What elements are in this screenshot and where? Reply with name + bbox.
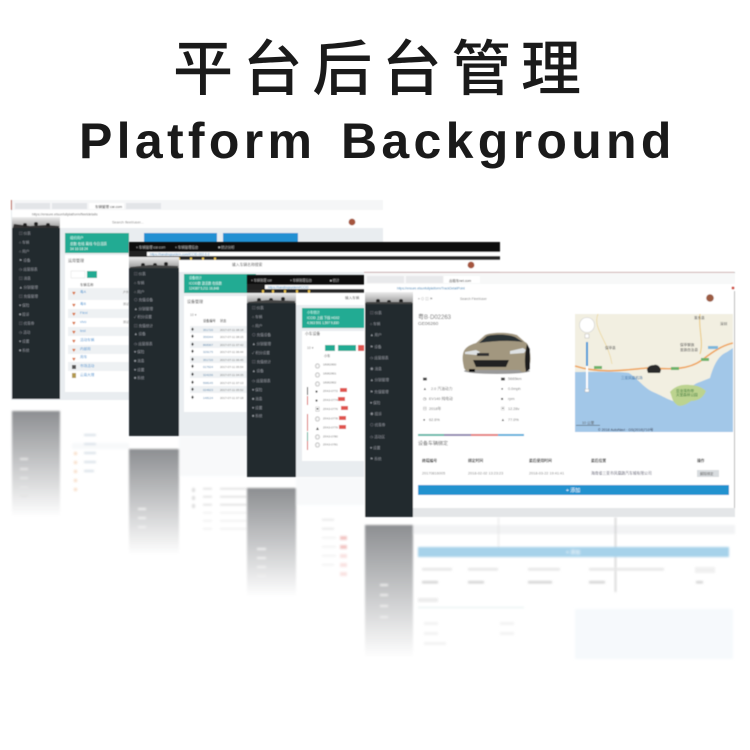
- sidebar: ▤ 消息: [19, 276, 31, 280]
- reflection: window 4: + 添加: [566, 549, 580, 556]
- sidebar: ▤ 充值统计: [134, 323, 153, 328]
- device table: 终端编号: [422, 458, 437, 463]
- stat card: teal: 设备统计: [189, 275, 203, 280]
- sidebar: ⚑ 系统: [370, 456, 382, 461]
- panel: vehicle list: ♥: [72, 291, 76, 297]
- sidebar: ⚑ 充值管理: [370, 389, 389, 394]
- panel: device table: ▣: [315, 407, 320, 413]
- device table: 操作: [697, 458, 705, 463]
- sidebar: ♥ 保险: [19, 302, 30, 308]
- panel: device table: 小车: [324, 353, 330, 358]
- panel: device list: 2017-07-11 08:15: [220, 335, 244, 339]
- sidebar: ♥ 保险: [370, 400, 381, 405]
- sidebar: ■ 消息: [134, 358, 145, 363]
- sidebar: ■ 系统: [134, 375, 145, 380]
- panel: device list: 351720: [203, 358, 213, 362]
- sidebar: ◷ 运营报表: [19, 266, 38, 272]
- panel: device table: ▲: [315, 426, 320, 432]
- device table: [422, 458, 719, 477]
- stat card: teal: [184, 274, 256, 293]
- panel: device table: ZFA3-0776: [323, 407, 338, 411]
- panel: device table: ZFA3-0780: [323, 434, 338, 438]
- window 3: device list: [247, 275, 365, 477]
- title: English heading: Platform: [79, 113, 316, 169]
- map: 保亭县: [605, 345, 616, 350]
- panel: device list: 2017-07-11 07:18: [220, 396, 244, 400]
- reflection: window 1: [12, 411, 129, 517]
- window 4: vehicle detail: [364, 272, 735, 517]
- vehicle plate heading: 粤B·D02263: [418, 313, 452, 321]
- vehicle specs: ▆: [423, 377, 427, 381]
- panel: device list: 324156: [203, 373, 213, 377]
- panel: vehicle list: 运用管理: [68, 257, 84, 263]
- panel: device list: 2017-07-11 06:44: [220, 350, 244, 354]
- vehicle specs: ▣: [501, 407, 505, 411]
- sidebar: ♥ 保险: [134, 349, 145, 354]
- sidebar: ◉ 消息: [370, 366, 382, 371]
- panel: device table: ◎: [315, 373, 320, 379]
- sidebar: [129, 257, 179, 436]
- vehicle specs: ■: [501, 397, 504, 401]
- panel: device list: 024923: [203, 388, 213, 392]
- vehicle specs: rpm: [508, 397, 515, 401]
- panel: device list: 设备编号: [203, 318, 216, 323]
- panel: device list: ♦: [191, 387, 194, 393]
- sidebar: ▲ 设备: [134, 331, 146, 336]
- sidebar: ◷ 运营报表: [252, 378, 271, 383]
- stat card: teal: [65, 233, 129, 253]
- window 2: device dashboard: [129, 242, 500, 436]
- vehicle specs: ▤: [423, 407, 427, 411]
- panel: device list: ♦: [191, 342, 194, 348]
- vehicle specs: 62.6%: [429, 418, 440, 422]
- map: 保亭黎族: [680, 342, 695, 347]
- panel: device table: ZFA3-0778: [323, 416, 338, 420]
- device table: 海南省三亚市凤凰路汽车城有限公司: [591, 470, 652, 476]
- vehicle specs: 0.0mph: [508, 387, 521, 391]
- add button: + 添加: [566, 487, 580, 494]
- panel: device list: 2017-07-11 07:13: [220, 381, 244, 385]
- map: [575, 314, 733, 432]
- panel: device table: ZFA3-0779: [323, 426, 338, 430]
- panel: device list: 状态: [220, 318, 227, 323]
- sidebar: ◷ 活动区: [370, 434, 385, 439]
- device table: 最后位置: [591, 458, 606, 463]
- device table: 解除绑定: [700, 471, 714, 476]
- sidebar: ■ 消息: [252, 396, 263, 401]
- panel: device list: ♦: [191, 349, 194, 355]
- sidebar: ▲ 分销管理: [19, 284, 38, 290]
- panel: vehicle list: Flexi: [80, 311, 88, 315]
- panel: device list: 329175: [203, 350, 213, 354]
- window 1: fleet dashboard: [11, 200, 383, 400]
- reflection: window 2: [129, 436, 247, 555]
- title: English heading: Background: [341, 113, 676, 169]
- sidebar: ♥ 设置: [19, 338, 30, 344]
- sidebar: ⌂ 车辆: [252, 314, 263, 319]
- map: 惠东县: [694, 315, 705, 320]
- stat card: teal: 小车统计: [307, 310, 321, 314]
- map: 亚龙湾热带: [676, 388, 694, 393]
- device table: 20170816005: [422, 472, 445, 476]
- title: Chinese heading: 平台后台管理: [173, 21, 591, 108]
- stat card: teal: 组织用户: [70, 235, 84, 240]
- panel: device list: 017924: [203, 365, 213, 369]
- browser tabs dark: × 车辆管理后台: [290, 278, 312, 282]
- panel: device table: ZFA3-0781: [323, 442, 338, 446]
- panel: vehicle list: 粤A: [80, 289, 87, 294]
- sidebar: ▤ 仪表: [370, 310, 382, 315]
- sidebar: ▲ 分销管理: [134, 306, 153, 311]
- panel: device table: ◎: [315, 382, 320, 388]
- sidebar: [247, 293, 296, 477]
- sidebar: ◷ 活动: [19, 330, 31, 334]
- bookmark bar: [247, 290, 365, 293]
- browser address bar dark: https://bandingsystem.com/ICCID-002-0-0: [150, 252, 210, 256]
- vehicle specs: ●: [423, 418, 425, 422]
- address bar: [364, 284, 735, 291]
- panel: device table: ●: [315, 389, 318, 395]
- panel: device list: 2017-07-11 05:54: [220, 365, 244, 369]
- footer strip: [413, 508, 735, 517]
- vehicle specs: ▆: [501, 377, 505, 381]
- sidebar: ◉ 投诉: [370, 411, 382, 416]
- panel: device table: 小车设备: [305, 331, 320, 336]
- map: 天堂森林公园: [676, 392, 698, 397]
- sidebar: ✓ 积分设置: [134, 314, 152, 319]
- window 1: fleet dashboard: Search fleet/user...: [112, 220, 144, 224]
- sidebar: ◎ 优惠券: [370, 422, 386, 427]
- panel: device list: 598145: [203, 381, 213, 385]
- panel: device list: 2017-07-11 06:45: [220, 358, 244, 362]
- device table: 绑定时间: [468, 458, 483, 463]
- panel: device table: ZFA3-0772: [323, 389, 338, 393]
- user avatar: [468, 262, 474, 268]
- sidebar: ⌂ 用户: [19, 248, 30, 254]
- sidebar: ♥ 设置: [134, 367, 145, 372]
- panel: device list: ♦: [191, 357, 194, 363]
- panel: vehicle list: ♥: [72, 330, 76, 336]
- sidebar: ▤ 充值管理: [19, 294, 38, 298]
- vehicle specs: [423, 377, 522, 422]
- car photo: [463, 333, 531, 374]
- browser address bar: https://ensure.etsunfullplatform/fleetdetails: [32, 212, 98, 216]
- panel: device list: ♦: [191, 334, 194, 340]
- panel: vehicle list: ♥: [72, 321, 76, 327]
- stat card: teal: [302, 308, 365, 328]
- panel: device list: 2017-07-11 07:42: [220, 343, 244, 347]
- colored status bar: [418, 434, 524, 436]
- stat card: teal: ICCID数 激活数 在线数: [189, 280, 223, 286]
- browser tabs dark: [247, 275, 365, 284]
- reflection: window 4: [365, 517, 735, 659]
- panel: device table: 10 ▾: [307, 346, 314, 350]
- panel: vehicle list: [65, 255, 129, 392]
- browser tabs dark: [129, 242, 500, 251]
- panel: device list: 2017-07-11 05:52: [220, 388, 244, 392]
- browser tabs dark: × 车辆管理后台: [175, 244, 199, 250]
- sidebar: ♥ 保险: [252, 387, 263, 392]
- panel: device table: ◎: [315, 443, 320, 449]
- browser tabs dark: × 车辆管理 car: [251, 278, 273, 282]
- panel: vehicle list: 户外: [123, 289, 129, 294]
- browser address bar: [12, 210, 383, 217]
- panel: device list: 2017-07-11 08:18: [220, 328, 244, 332]
- panel: device list: ♦: [191, 395, 194, 401]
- browser address bar dark: [129, 251, 500, 257]
- toolbar: ≡ ⊙ ▤ ⚑: [418, 297, 433, 301]
- address bar: https://ensure.etsunfullplatform/TrackDetailPoint: [397, 286, 465, 290]
- vehicle plate heading: GE06260: [418, 321, 439, 327]
- panel: vehicle list: 测试: [123, 319, 129, 324]
- sidebar: ◎ 充值设备: [252, 332, 271, 337]
- sidebar: ⚑ 设备: [19, 258, 31, 262]
- sidebar: ♥ 设置: [252, 405, 263, 410]
- address bar dark: [247, 284, 365, 290]
- stat card: teal: 124387 5,211 16,848: [189, 286, 219, 290]
- add button: [418, 485, 729, 495]
- panel: device table: 18062801: [323, 372, 337, 376]
- sidebar: ▤ 仪表: [19, 230, 31, 236]
- browser tabs: 出租车net.com: [449, 278, 471, 283]
- browser tabs: [12, 200, 383, 210]
- panel: device table: ZFA3-0774: [323, 398, 338, 402]
- vehicle specs: 77.0%: [508, 418, 519, 422]
- sidebar: ⌂ 车辆: [134, 280, 145, 285]
- vehicle specs: 2018年: [429, 406, 441, 411]
- sidebar: ⌂ 车辆: [370, 321, 381, 326]
- panel: device table: 18062802: [323, 380, 337, 384]
- sidebar: ▲ 用户: [370, 332, 382, 337]
- browser tabs: [364, 273, 735, 284]
- panel: device list: ♦: [191, 372, 194, 378]
- reflection: window 3: [247, 477, 365, 597]
- address bar dark: https://bandingsystem/ICCID: [268, 285, 309, 289]
- vehicle specs: EV140 纯电动: [429, 396, 453, 401]
- toolbar: [418, 294, 714, 302]
- panel: device list: 868367: [203, 343, 213, 347]
- panel: vehicle list: 云南大理: [80, 372, 95, 377]
- window 3: device list: 输入车辆: [345, 295, 360, 300]
- sidebar: ⌂ 用户: [134, 289, 145, 294]
- sidebar: ◎ 充值设备: [134, 297, 153, 302]
- panel: device table: ◎: [315, 435, 320, 441]
- vehicle specs: ◷: [423, 397, 427, 401]
- stat card: blue 1: [144, 233, 217, 253]
- sidebar: ▤ 充值统计: [252, 359, 271, 364]
- device table: 2018-02-02 13:23:23: [468, 472, 503, 476]
- sidebar: [12, 217, 60, 399]
- panel: device list: 351720: [203, 328, 213, 332]
- panel: vehicle list: 粤B: [80, 301, 87, 306]
- panel: vehicle list: ♥: [72, 339, 76, 345]
- panel: device table: ◎: [315, 364, 320, 370]
- panel: vehicle list: 车辆名称: [80, 282, 94, 287]
- panel: device list: ♦: [191, 327, 194, 333]
- sidebar: [365, 292, 413, 517]
- panel: device table: ●: [315, 398, 318, 404]
- stat card: teal: 总数 在线 离线 今日活跃: [70, 241, 107, 246]
- vehicle plate heading: [418, 313, 452, 327]
- window 2: device dashboard: 输入车辆名称搜索: [232, 262, 263, 267]
- stat card: blue 2: [223, 233, 298, 253]
- sidebar: ▲ 分销管理: [252, 341, 271, 346]
- toolbar: Search Fleet/user: [460, 297, 488, 301]
- device table: 最后使用时间: [529, 458, 552, 463]
- panel: vehicle list: ♥: [72, 348, 76, 354]
- sidebar: ▲ 设备: [252, 368, 264, 373]
- panel: vehicle list: 测试: [123, 301, 129, 306]
- map: 三亚凤凰机场: [621, 375, 643, 380]
- stat card: teal: 34 16 18 24: [70, 247, 88, 251]
- vehicle specs: ▲: [501, 418, 505, 422]
- panel: device list: ♦: [191, 364, 194, 370]
- browser tabs dark: ■ 统计: [330, 278, 340, 282]
- sidebar: ■ 投诉: [19, 312, 30, 316]
- sidebar: ■ 系统: [19, 348, 30, 352]
- vehicle specs: ●: [501, 387, 503, 391]
- browser tabs: 车辆管理 car.com: [95, 204, 122, 209]
- browser tabs dark: × 车辆管理 car.com: [136, 244, 165, 250]
- sidebar: ◷ 运营报表: [134, 341, 153, 346]
- vehicle specs: 12.28v: [508, 407, 520, 411]
- panel: device list: ♦: [191, 380, 194, 386]
- panel: vehicle list: ♥: [72, 312, 76, 318]
- map: © 2018 AutoNavi · GS(2016)710号: [598, 427, 654, 432]
- sidebar: ▤ 仪表: [134, 271, 146, 276]
- vehicle specs: 2.0 汽油动力: [431, 386, 453, 391]
- sidebar: ⚑ 设备: [370, 344, 382, 349]
- sidebar: ■ 系统: [252, 413, 263, 418]
- browser tabs dark: ■ 统计分析: [218, 244, 235, 250]
- user avatar: [349, 219, 355, 225]
- map: 深圳: [720, 321, 728, 326]
- panel: device list: 356344: [203, 335, 213, 339]
- section heading: 设备车辆绑定: [418, 440, 448, 447]
- sidebar: ◷ 运营报表: [370, 355, 389, 360]
- panel: device list: 2017-07-11 04:35: [220, 373, 244, 377]
- bookmark bar: [129, 257, 500, 260]
- vehicle specs: ▲: [423, 387, 427, 391]
- sidebar: ▤ 优惠券: [19, 320, 35, 326]
- panel: device table: 18062800: [323, 362, 337, 366]
- vehicle specs: 5665km: [508, 377, 522, 381]
- map: 苗族自治县: [680, 347, 698, 352]
- panel: vehicle list: ♥: [72, 303, 76, 309]
- panel: vehicle list: 用车: [80, 354, 88, 359]
- sidebar: ▤ 仪表: [252, 305, 264, 310]
- panel: device list: 10 ▾: [190, 313, 197, 317]
- panel: vehicle list: ♥: [72, 357, 76, 363]
- sidebar: ⌂ 用户: [252, 323, 263, 328]
- sidebar: ✓ 积分设置: [252, 350, 270, 355]
- panel: device list: 设备管理: [187, 298, 203, 304]
- map: 10 公里: [582, 420, 595, 425]
- panel: device table: [302, 331, 365, 461]
- panel: vehicle list: vivo: [80, 320, 86, 324]
- stat card: teal: 4,963 591 1,597 9,830: [307, 321, 339, 325]
- panel: device table: ◎: [315, 417, 320, 423]
- sidebar: ♥ 设置: [370, 445, 381, 450]
- panel: vehicle list: 内部用: [80, 346, 91, 351]
- sidebar: ⌂ 车辆: [19, 240, 30, 244]
- panel: device list: [184, 296, 247, 412]
- stat card: teal: ICCID 上线 下线 HG02: [307, 315, 340, 320]
- sidebar: ▲ 分销管理: [370, 377, 389, 382]
- panel: vehicle list: 市场活动: [80, 363, 95, 368]
- panel: vehicle list: 活动车辆: [80, 337, 95, 342]
- panel: vehicle list: test: [80, 329, 86, 333]
- panel: device list: 148124: [203, 396, 213, 400]
- device table: 2018-03-22 19:41:41: [529, 472, 564, 476]
